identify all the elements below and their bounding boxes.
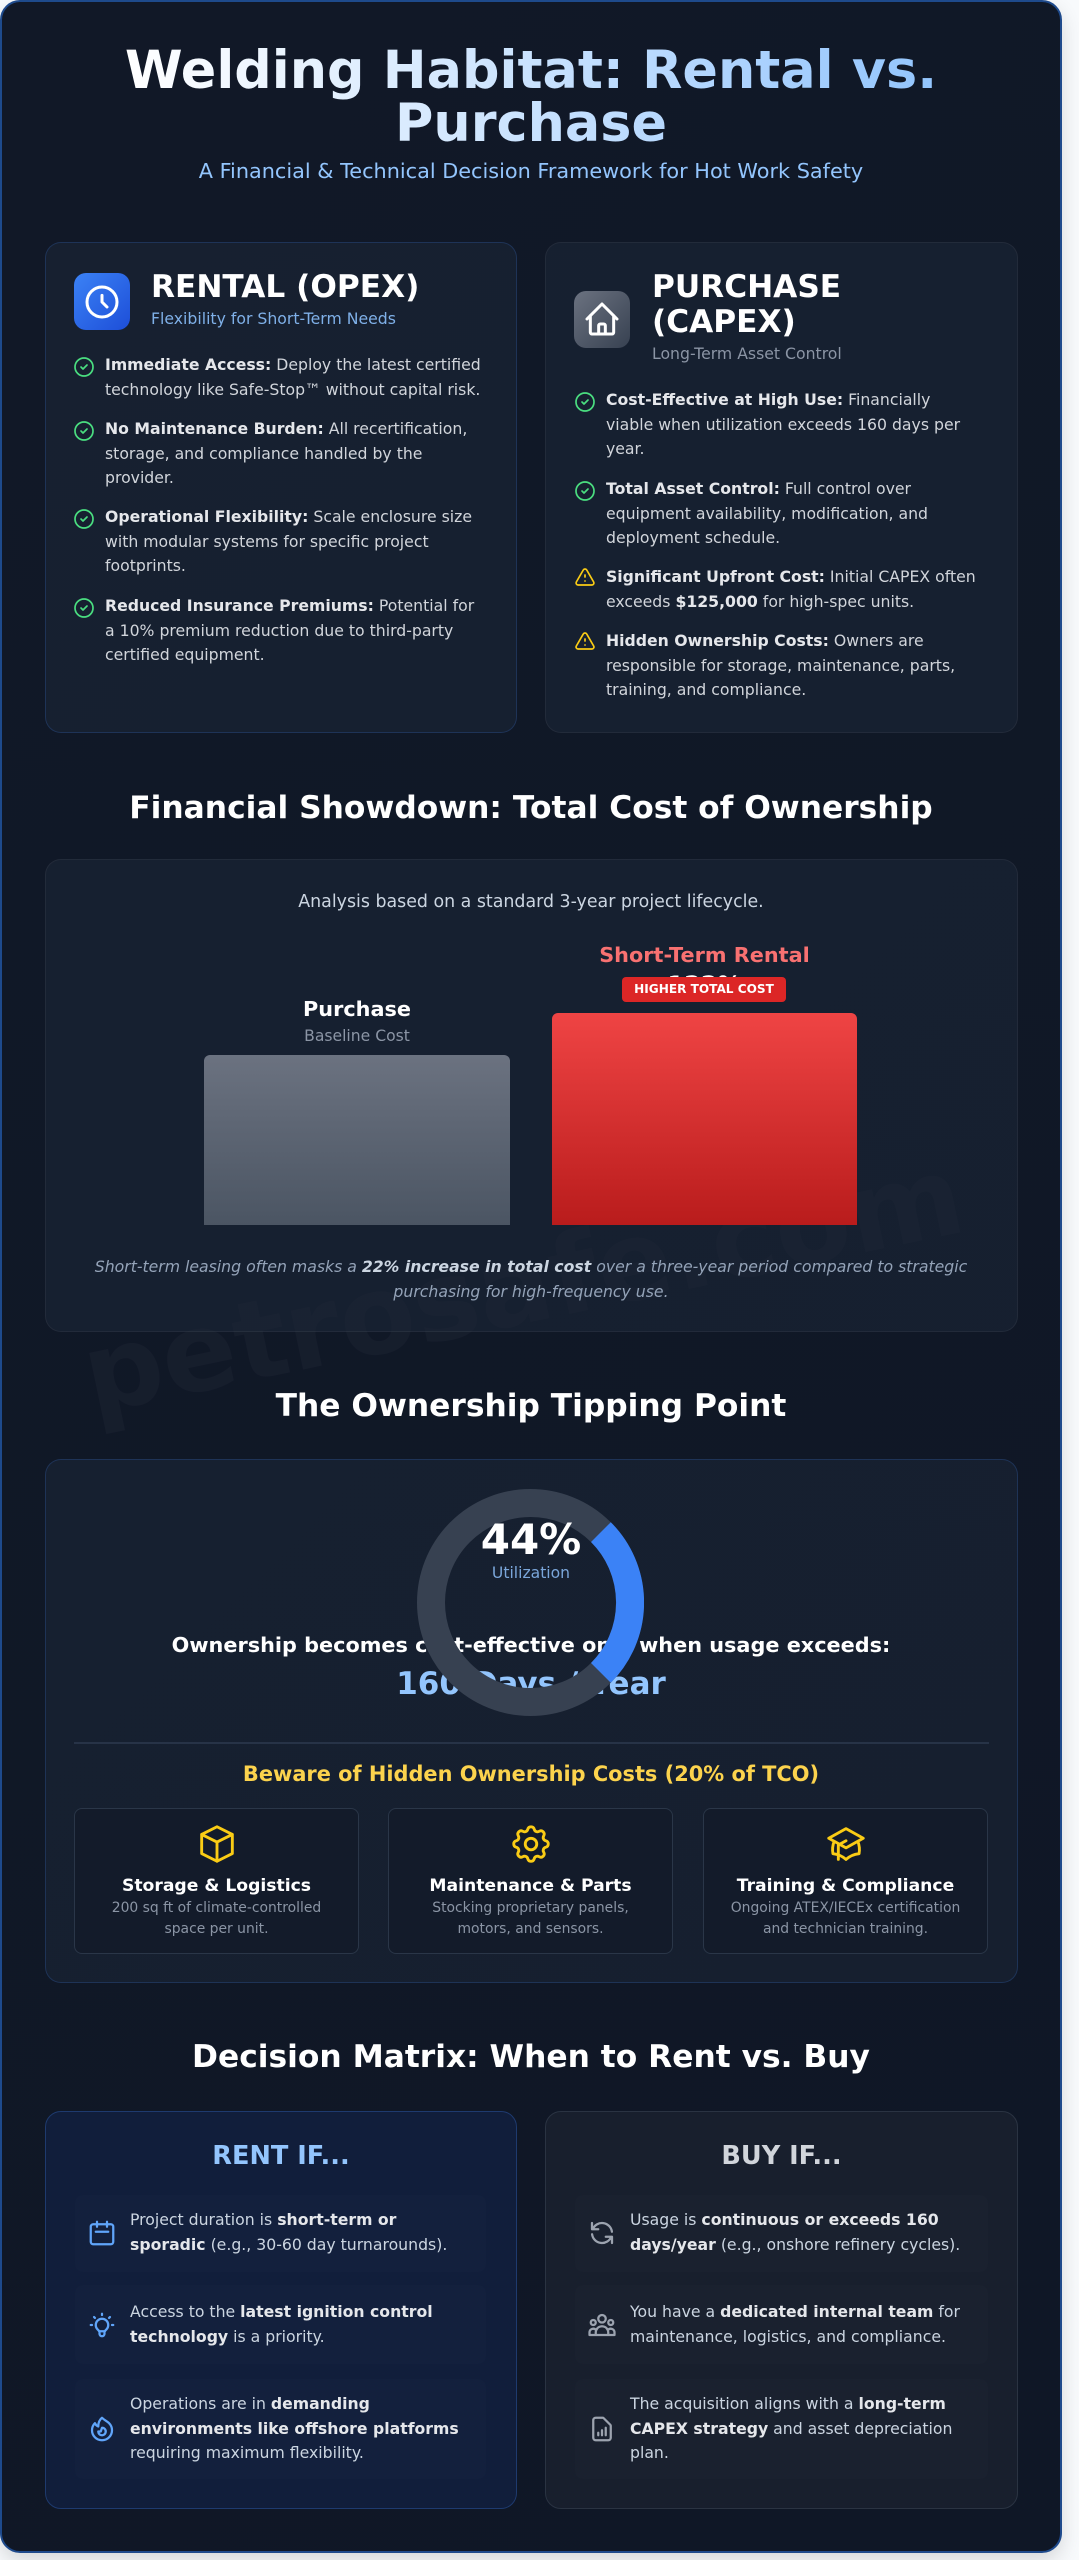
heading: tipping point: The Ownership Tipping Point: [276, 1388, 786, 1424]
buy heading: BUY IF...: [721, 2141, 842, 2171]
panel: rental: [45, 242, 517, 733]
rental subheading: Flexibility for Short-Term Needs: [151, 309, 396, 328]
donut chart: [417, 1489, 644, 1716]
panel: purchase: [545, 242, 1018, 733]
card: maintenance: Stocking proprietary panels,: [432, 1900, 629, 1916]
chart caption: Short-term leasing often masks a 22% increase in total cost over a three-year period compared to strategic: [95, 1257, 967, 1276]
rent row 1: [75, 2195, 486, 2272]
purchase point 3: Significant Upfront Cost: Initial CAPEX often: [606, 567, 976, 586]
buy row 1: Usage is continuous or exceeds 160: [630, 2210, 939, 2229]
rental benefit 2: storage, and compliance handled by the: [105, 444, 422, 463]
rental benefit 1: Immediate Access: Deploy the latest certified: [105, 355, 481, 374]
card: storage: Storage & Logistics: [122, 1876, 311, 1896]
heading: hidden costs: Beware of Hidden Ownership Costs (20% of TCO): [243, 1762, 819, 1786]
buy row 3: The acquisition aligns with a long-term: [630, 2394, 946, 2413]
rental benefit 3: [74, 507, 472, 575]
panel: tipping point: [45, 1459, 1018, 1983]
card: training: Ongoing ATEX/IECEx certification: [731, 1900, 960, 1916]
value behind badge: 122%: [667, 971, 742, 999]
rental benefit 4: a 10% premium reduction due to third-party: [105, 621, 453, 640]
icon: house: [574, 291, 630, 348]
badge: higher total cost: HIGHER TOTAL COST: [634, 982, 774, 996]
rental benefit 3: footprints.: [105, 556, 186, 575]
card: maintenance: Maintenance & Parts: [429, 1876, 632, 1896]
rental benefit 4: Reduced Insurance Premiums: Potential for: [105, 596, 474, 615]
rent row 3: Operations are in demanding: [130, 2394, 370, 2413]
purchase point 1: viable when utilization exceeds 160 days per: [606, 415, 960, 434]
heading: financial showdown: Financial Showdown: Total Cost of Ownership: [129, 790, 933, 826]
card: storage: [74, 1808, 359, 1954]
buy row 1: days/year (e.g., onshore refinery cycles).: [630, 2235, 960, 2254]
rent row 2: [75, 2285, 486, 2364]
bar: rental: [552, 1013, 857, 1225]
title: Purchase: [395, 93, 667, 154]
card: training: Training & Compliance: [737, 1876, 954, 1896]
panel: buy if: [545, 2111, 1018, 2509]
card: storage: space per unit.: [164, 1921, 268, 1937]
rent row 3: environments like offshore platforms: [130, 2419, 459, 2438]
divider: [74, 1742, 989, 1744]
purchase subheading: Long-Term Asset Control: [652, 344, 842, 363]
rental benefit 2: [74, 419, 467, 487]
rental benefit 4: [74, 596, 474, 664]
buy row 2: You have a dedicated internal team for: [630, 2302, 960, 2321]
purchase point 2: deployment schedule.: [606, 528, 780, 547]
chart caption: [94, 1257, 967, 1301]
label: short-term rental: Short-Term Rental: [599, 943, 810, 967]
buy row 2: [575, 2285, 988, 2364]
buy row 3: plan.: [630, 2443, 669, 2462]
sublabel: baseline: Baseline Cost: [304, 1027, 410, 1045]
badge: higher total cost: [622, 977, 786, 1002]
purchase point 4: Hidden Ownership Costs: Owners are: [606, 631, 924, 650]
card: training: and technician training.: [763, 1921, 928, 1937]
card: storage: 200 sq ft of climate-controlled: [112, 1900, 321, 1916]
heading: decision matrix: Decision Matrix: When to Rent vs. Buy: [192, 2039, 870, 2075]
chart caption: purchasing for high-frequency use.: [393, 1282, 669, 1301]
card: training: [703, 1808, 988, 1954]
tipping value: 160 Days / Year: [396, 1666, 666, 1702]
purchase heading: (CAPEX): [652, 304, 796, 340]
rental heading: RENTAL (OPEX): [151, 269, 419, 305]
purchase point 2: Total Asset Control: Full control over: [606, 479, 911, 498]
buy row 2: maintenance, logistics, and compliance.: [630, 2327, 946, 2346]
rent row 2: technology is a priority.: [130, 2327, 325, 2346]
rent row 2: Access to the latest ignition control: [130, 2302, 433, 2321]
purchase heading: [652, 269, 841, 340]
rental benefit 1: [74, 355, 481, 399]
purchase point 1: year.: [606, 439, 645, 458]
rent row 3: requiring maximum flexibility.: [130, 2443, 364, 2462]
panel: financial chart: [45, 859, 1018, 1332]
buy row 3: [575, 2379, 988, 2479]
purchase point 1: [575, 390, 960, 458]
icon: clock: [74, 273, 130, 330]
purchase point 2: [575, 479, 928, 547]
tipping statement: Ownership becomes cost-effective only when usage exceeds:: [172, 1633, 890, 1657]
rent row 1: Project duration is short-term or: [130, 2210, 396, 2229]
rental benefit 3: Operational Flexibility: Scale enclosure size: [105, 507, 472, 526]
purchase point 4: training, and compliance.: [606, 680, 806, 699]
rent row 1: sporadic (e.g., 30-60 day turnarounds).: [130, 2235, 447, 2254]
panel: rent if: [45, 2111, 517, 2509]
buy row 1: [575, 2195, 988, 2272]
purchase point 3: [575, 567, 976, 611]
purchase heading: PURCHASE: [652, 269, 841, 305]
rental benefit 3: with modular systems for specific project: [105, 532, 429, 551]
purchase point 4: responsible for storage, maintenance, parts,: [606, 656, 955, 675]
purchase point 3: exceeds $125,000 for high-spec units.: [606, 592, 914, 611]
donut value: 44%: [481, 1515, 581, 1564]
chart note: Analysis based on a standard 3-year project lifecycle.: [298, 892, 764, 912]
subtitle: A Financial & Technical Decision Framework for Hot Work Safety: [199, 159, 863, 183]
purchase point 4: [575, 631, 955, 699]
buy row 3: CAPEX strategy and asset depreciation: [630, 2419, 952, 2438]
title: Welding Habitat: Rental vs.: [125, 40, 937, 101]
card: maintenance: motors, and sensors.: [458, 1921, 604, 1937]
rental benefit 1: technology like Safe-Stop™ without capital risk.: [105, 380, 480, 399]
rent row 3: [75, 2379, 486, 2479]
purchase point 1: Cost-Effective at High Use: Financially: [606, 390, 930, 409]
watermark: petrosafe.com: [72, 1131, 974, 1439]
purchase point 2: equipment availability, modification, and: [606, 504, 928, 523]
bar: purchase: [204, 1055, 510, 1225]
label: purchase: Purchase: [303, 997, 411, 1021]
rental benefit 2: No Maintenance Burden: All recertification,: [105, 419, 467, 438]
card: maintenance: [388, 1808, 673, 1954]
rent heading: RENT IF...: [212, 2141, 350, 2171]
rental benefit 4: certified equipment.: [105, 645, 265, 664]
title: [0, 44, 1062, 150]
donut label: Utilization: [492, 1564, 570, 1582]
rental benefit 2: provider.: [105, 468, 174, 487]
